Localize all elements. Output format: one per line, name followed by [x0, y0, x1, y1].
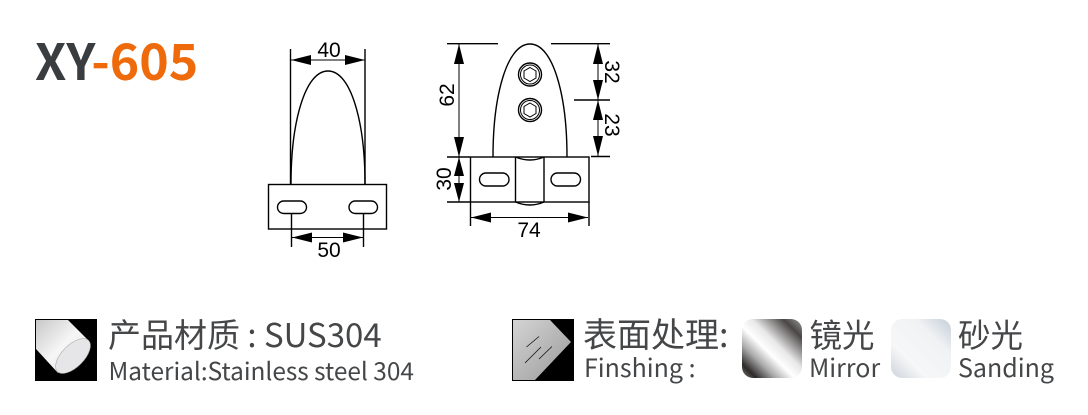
dimension 40: [291, 39, 365, 65]
material heading: 产品材质 : SUS304: [108, 309, 382, 357]
extension lines: [290, 49, 365, 247]
title: XY-605: [35, 23, 198, 95]
dimension 23: [593, 100, 623, 156]
finishing english: Finshing :: [584, 349, 696, 385]
sanding label: Sanding: [958, 349, 1054, 385]
icon: material cylinder: [35, 319, 97, 381]
screw top: [518, 63, 542, 86]
sanding label: 砂光: [958, 310, 1023, 357]
dimension 30: 30: [433, 167, 456, 191]
hinge column: [516, 157, 544, 205]
diagram: side view: [268, 39, 386, 262]
dimension 50: 50: [317, 239, 341, 262]
material english: Material:Stainless steel 304: [108, 353, 414, 388]
dimension 30: [433, 157, 464, 202]
dimension 40: 40: [317, 39, 341, 62]
body outline: [493, 44, 567, 157]
dimension 62: 62: [436, 83, 459, 107]
dimension 74: [471, 212, 588, 242]
left slot: [278, 201, 306, 214]
dimension 32: 32: [600, 60, 623, 84]
diagram: front view: [433, 44, 623, 242]
right slot: [551, 173, 580, 186]
screw bottom: [518, 98, 542, 122]
swatch: mirror: [742, 319, 802, 378]
dimension 23: 23: [600, 113, 623, 137]
extension lines: [447, 44, 610, 226]
dimension 74: 74: [517, 219, 541, 242]
base plate: [268, 184, 386, 229]
mirror label: [809, 310, 880, 385]
material text: [108, 309, 414, 388]
left slot: [480, 173, 509, 186]
sanding label: [958, 310, 1054, 385]
dimension 32: [593, 44, 623, 100]
right slot: [349, 201, 378, 214]
icon: finishing plate: [512, 319, 574, 381]
mirror label: 镜光: [810, 310, 875, 357]
dimension 62: [436, 44, 464, 157]
finishing heading: 表面处理:: [583, 308, 728, 357]
body outline: [291, 71, 365, 184]
finishing text: [583, 308, 728, 385]
base plate: [470, 157, 589, 202]
mirror label: Mirror: [809, 349, 880, 385]
swatch: sanding: [891, 319, 951, 378]
dimension 50: [292, 232, 363, 262]
